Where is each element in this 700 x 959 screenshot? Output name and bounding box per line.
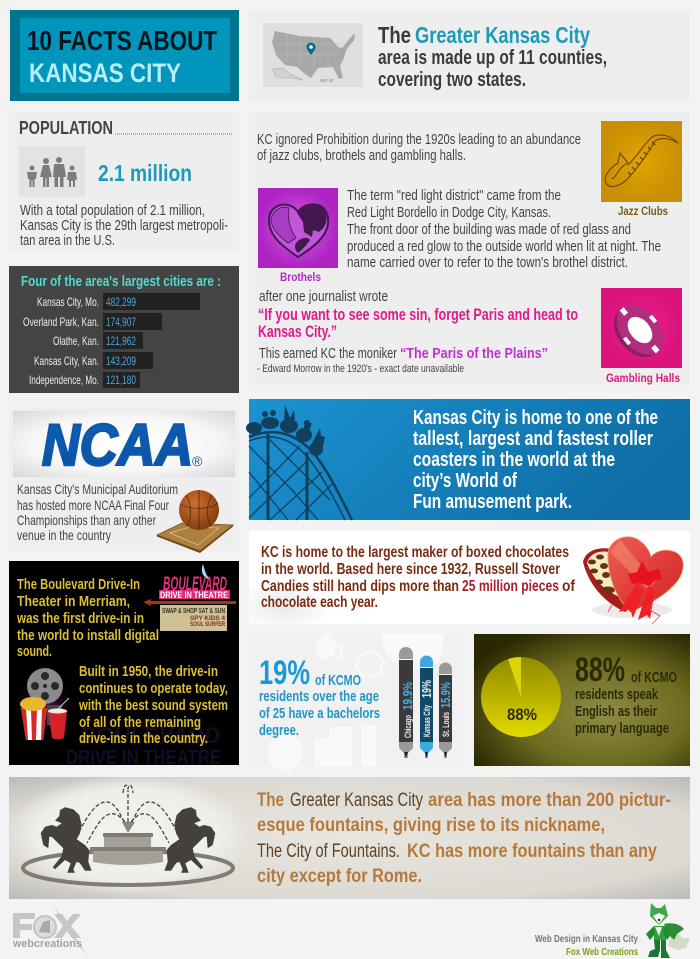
icon: drive-in sign: SWAP & SHOP SAT & SUN xyxy=(162,608,225,615)
panel: largest cities bar chart: Overland Park, Kan. xyxy=(23,315,99,329)
left horse xyxy=(41,807,92,873)
NCAA logo: ® xyxy=(192,453,203,469)
panel: education: degree. xyxy=(259,722,299,739)
panel: population: With a total population of 2.1 million, xyxy=(20,202,205,219)
footer credit text: Web Design in Kansas City xyxy=(535,933,638,945)
icon: fountain with horses xyxy=(6,775,250,895)
panel: fountains: The City of Fountains. xyxy=(257,841,400,862)
NCAA logo: NCAA xyxy=(42,413,193,478)
panel: Boulevard drive-in: with the best sound system xyxy=(78,697,228,714)
panel: English speakers: residents speak xyxy=(575,686,658,703)
pie chart: 88% xyxy=(507,705,537,724)
icon: drive-in sign: DRIVE IN THEATRE xyxy=(160,590,228,600)
label: jazz clubs: Jazz Clubs xyxy=(618,204,668,218)
pencil: Chicago: Chicago xyxy=(403,715,414,738)
panel: English speakers: primary language xyxy=(575,720,669,737)
panel: NCAA xyxy=(9,407,239,553)
panel: chocolates: Candies still hand dips more than xyxy=(261,578,459,595)
icon: jazz clubs saxophone xyxy=(601,121,682,202)
panel: prohibition history: The term "red light district" came from the xyxy=(347,187,561,204)
panel: largest cities bar chart: 121,180 xyxy=(106,373,136,387)
panel: Boulevard drive-in xyxy=(9,561,239,769)
panel: greater Kansas City: covering two states. xyxy=(378,69,526,91)
pencil: St. Louis: 15.9% xyxy=(438,682,453,708)
panel: education xyxy=(249,632,465,770)
panel: fountains: KC has more fountains than any xyxy=(407,841,657,862)
title panel: 10 FACTS ABOUT xyxy=(27,25,217,56)
icon: US map with pin xyxy=(263,23,363,87)
panel: English speakers: 88% xyxy=(575,651,625,689)
panel: prohibition history: KC ignored Prohibition during the 1920s leading to an abundance xyxy=(257,131,581,148)
panel: largest cities bar chart: Independence, Mo. xyxy=(29,373,99,387)
pencil: St. Louis: St. Louis xyxy=(441,712,452,737)
panel: roller coaster: Fun amusement park. xyxy=(413,491,572,513)
panel: English speakers: of KCMO xyxy=(631,669,677,686)
icon: drive-in sign: SOUL SURFER xyxy=(190,622,226,628)
panel: education: of KCMO xyxy=(315,672,361,689)
icon: roller coaster silhouette xyxy=(246,405,352,520)
pie chart xyxy=(481,657,561,737)
panel: education: 19% xyxy=(259,654,310,692)
title panel xyxy=(10,10,239,101)
footer credit text xyxy=(535,933,638,958)
pencil: Kansas City: 19% xyxy=(419,680,434,698)
panel: fountains xyxy=(6,775,690,899)
panel: largest cities bar chart: 121,962 xyxy=(106,334,136,348)
panel: largest cities bar chart: Four of the area's largest cities are : xyxy=(21,273,221,290)
panel: greater Kansas City xyxy=(249,10,690,101)
icon: film projector with popcorn and cup xyxy=(9,668,81,741)
panel: prohibition history: Red Light Bordello in Dodge City, Kansas. xyxy=(347,204,551,221)
panel: chocolates xyxy=(249,531,690,624)
panel: roller coaster: city’s World of xyxy=(413,470,517,492)
icon: drive-in sign: BOULEVARD xyxy=(163,574,227,595)
panel: NCAA: venue in the country xyxy=(17,527,111,543)
panel: fountains: esque fountains, giving rise to its nickname, xyxy=(257,815,605,836)
panel: Boulevard drive-in: drive-ins in the country. xyxy=(79,730,208,747)
icon: brothels kissing heart xyxy=(258,188,338,268)
panel: Boulevard drive-in: The Boulevard Drive-In xyxy=(17,576,140,593)
panel: population: tan area in the U.S. xyxy=(20,232,115,249)
panel: prohibition history: of jazz clubs, brothels and gambling halls. xyxy=(257,147,466,164)
label: brothels: Brothels xyxy=(280,270,321,284)
icon: basketball on court xyxy=(157,490,233,553)
label: gambling halls: Gambling Halls xyxy=(606,371,680,385)
logo: Fox webcreations xyxy=(12,906,88,956)
panel: chocolates: KC is home to the largest maker of boxed chocolates xyxy=(261,544,569,561)
panel: fountains: The xyxy=(257,790,284,811)
panel: prohibition history: “The Paris of the Plains” xyxy=(400,345,548,362)
panel: Boulevard drive-in: Built in 1950, the drive-in xyxy=(79,663,218,680)
panel: greater Kansas City: area is made up of 11 counties, xyxy=(378,47,607,69)
panel: chocolates: in the world. Based here since 1932, Russell Stover xyxy=(261,561,560,578)
panel: NCAA: has hosted more NCAA Final Four xyxy=(17,497,169,513)
panel: population: 2.1 million xyxy=(98,160,192,186)
panel: prohibition history: Kansas City.” xyxy=(258,322,337,341)
panel: chocolates: 25 million pieces xyxy=(462,578,559,595)
panel: education: of 25 have a bachelors xyxy=(259,705,380,722)
panel: education: residents over the age xyxy=(259,688,379,705)
logo: Fox webcreations: webcreations xyxy=(12,938,82,950)
icon: heart chocolate box xyxy=(583,537,683,624)
panel: greater Kansas City: The xyxy=(378,22,411,48)
pencil: Kansas City xyxy=(419,656,434,758)
panel: fountains: Greater Kansas City xyxy=(290,790,423,811)
panel: largest cities bar chart: Kansas City, Mo. xyxy=(37,295,99,309)
panel: largest cities bar chart: Olathe, Kan. xyxy=(53,334,99,348)
panel: English speakers: English as their xyxy=(575,703,657,720)
panel: prohibition history xyxy=(249,112,690,385)
footer credit text: Fox Web Creations xyxy=(566,946,638,958)
panel: prohibition history: after one journalist wrote xyxy=(259,288,388,305)
title panel: KANSAS CITY xyxy=(29,58,181,88)
icon: drive-in sign xyxy=(143,564,236,631)
pencil: Chicago: 19.9% xyxy=(400,682,415,710)
panel: largest cities bar chart: 143,209 xyxy=(106,354,136,368)
icon: gambling poker chip xyxy=(601,288,682,368)
panel: prohibition history: - Edward Morrow in the 1920's - exact date unavailable xyxy=(257,363,464,375)
right horse xyxy=(164,807,215,873)
panel: fountains: city except for Rome. xyxy=(257,866,422,887)
pencil: Kansas City: Kansas City xyxy=(422,705,432,737)
panel: Boulevard drive-in: Theater in Merriam, xyxy=(17,593,130,610)
panel: prohibition history: This earned KC the moniker xyxy=(259,345,397,362)
panel: prohibition history: name carried over to refer to the town's brothel district. xyxy=(347,254,628,271)
panel: Boulevard drive-in: continues to operate today, xyxy=(79,680,228,697)
panel: chocolates: chocolate each year. xyxy=(261,594,378,611)
panel: largest cities bar chart: 482,299 xyxy=(106,295,136,309)
panel: population: POPULATION xyxy=(19,118,113,138)
panel: roller coaster xyxy=(246,399,690,520)
panel: largest cities bar chart xyxy=(9,266,239,393)
panel: largest cities bar chart: 174,907 xyxy=(106,315,136,329)
panel: Boulevard drive-in: of all of the remaining xyxy=(79,714,201,731)
panel: roller coaster: coasters in the world at the xyxy=(413,449,615,471)
panel: Boulevard drive-in: sound. xyxy=(17,643,52,660)
icon: fox mascot xyxy=(646,903,690,958)
icon: drive-in sign: SPY KIDS 4 xyxy=(190,616,226,622)
panel: chocolates: of xyxy=(562,578,576,595)
watermark sign xyxy=(66,723,221,769)
panel: largest cities bar chart: Kansas City, Kan. xyxy=(34,354,99,368)
panel: greater Kansas City: Greater Kansas City xyxy=(415,22,590,48)
pencil: St. Louis xyxy=(438,662,453,758)
panel: English speakers xyxy=(474,634,690,766)
pencil: Chicago xyxy=(399,647,415,758)
panel: NCAA: Kansas City's Municipal Auditorium xyxy=(17,481,178,497)
panel: Boulevard drive-in: was the first drive-in in xyxy=(16,610,144,627)
icon: family xyxy=(19,146,85,197)
panel: Boulevard drive-in: the world to install digital xyxy=(17,627,159,644)
panel: population xyxy=(9,112,239,252)
panel: prohibition history: “If you want to see some sin, forget Paris and head to xyxy=(258,305,578,324)
watermark sign: BOULEVARD xyxy=(80,723,220,748)
panel: NCAA: Championships than any other xyxy=(17,512,156,528)
panel: fountains: area has more than 200 pictur- xyxy=(428,790,671,811)
watermark sign: DRIVE IN THEATRE xyxy=(66,747,221,769)
panel: population: Kansas City is the 29th largest metropoli- xyxy=(20,217,228,234)
